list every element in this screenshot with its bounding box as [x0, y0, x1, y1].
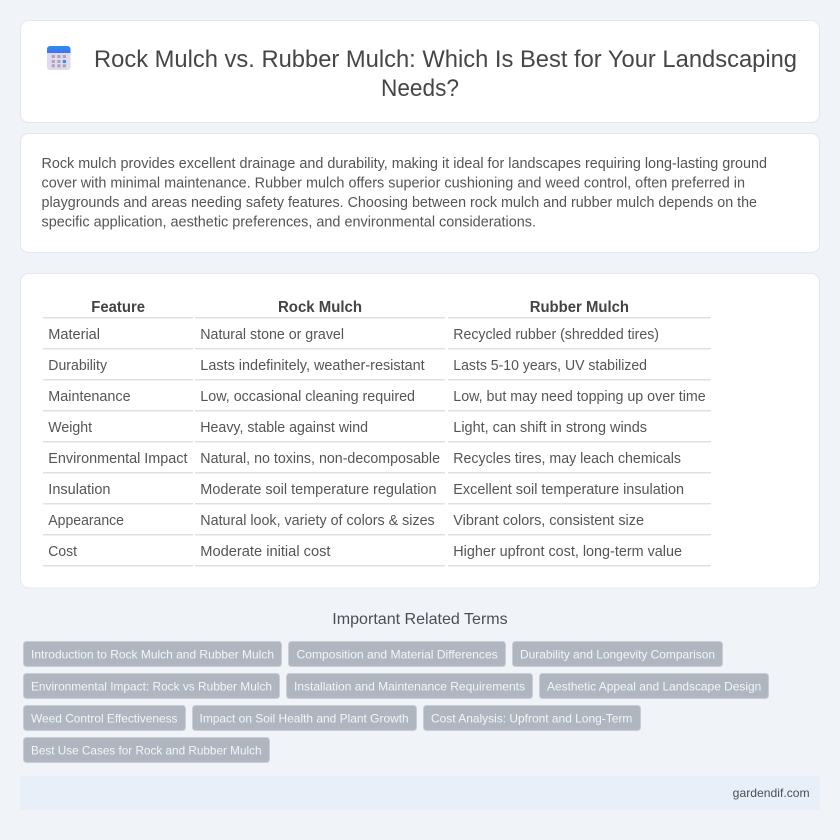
chip [286, 674, 532, 698]
table row: durability: Lasts indefinitely, weather-resistant [200, 358, 425, 374]
heading: important related terms: Important Related Terms [332, 611, 508, 628]
chip [288, 642, 506, 666]
panel: related term chips [24, 642, 768, 762]
table row: durability: Durability [48, 358, 108, 374]
chip: Best Use Cases for Rock and Rubber Mulch [31, 743, 262, 757]
chip: Environmental Impact: Rock vs Rubber Mulch [31, 679, 272, 693]
chip [24, 706, 186, 730]
text block: summary paragraph [42, 156, 767, 230]
table header [43, 299, 711, 318]
table header: Rock Mulch [278, 299, 362, 316]
table row: material: Material [48, 327, 100, 343]
table row: material: Recycled rubber (shredded tires) [453, 327, 659, 343]
text block: summary paragraph: specific application, aesthetic preferences, and environmental considerations. [42, 214, 536, 230]
chip: Durability and Longevity Comparison [520, 647, 715, 661]
table row: material: Natural stone or gravel [200, 327, 344, 343]
table row: material [43, 327, 711, 350]
panel: title card [20, 20, 820, 122]
table row: maintenance: Low, occasional cleaning required [200, 389, 415, 405]
chip: Introduction to Rock Mulch and Rubber Mulch [31, 647, 274, 661]
table row: environmental impact: Environmental Impact [48, 451, 188, 467]
table row: environmental impact: Recycles tires, may leach chemicals [453, 451, 681, 467]
table row: appearance: Appearance [48, 513, 124, 529]
table row: cost: Cost [48, 544, 77, 560]
table row: weight: Heavy, stable against wind [200, 420, 368, 436]
chip [192, 706, 416, 730]
table row: appearance: Vibrant colors, consistent size [453, 513, 644, 529]
table row: weight: Light, can shift in strong winds [453, 420, 647, 436]
table row: insulation [43, 482, 711, 504]
footer: gardendif.com [733, 786, 810, 800]
chip: Weed Control Effectiveness [31, 711, 178, 725]
table row: cost: Moderate initial cost [200, 544, 330, 560]
table header: Feature [91, 299, 145, 316]
chip: Impact on Soil Health and Plant Growth [200, 711, 409, 725]
chip: Aesthetic Appeal and Landscape Design [547, 679, 761, 693]
table row: cost [43, 544, 711, 566]
chip [24, 738, 270, 762]
chip: Installation and Maintenance Requirements [294, 679, 525, 693]
text block: summary paragraph: Rock mulch provides excellent drainage and durability, making it ideal for landscapes requiring long-lasting ground [42, 156, 767, 172]
table row: appearance [43, 513, 711, 536]
chip [24, 642, 282, 666]
table row: durability [43, 358, 711, 380]
table header: Rubber Mulch [530, 299, 629, 316]
table row: maintenance [43, 389, 711, 412]
table row: maintenance: Maintenance [48, 389, 131, 405]
chip: Cost Analysis: Upfront and Long-Term [431, 711, 632, 725]
title: Needs? [381, 75, 459, 102]
table row: environmental impact [43, 451, 711, 474]
chip: Composition and Material Differences [296, 647, 498, 661]
table row: cost: Higher upfront cost, long-term value [453, 544, 682, 560]
text block: summary paragraph: playgrounds and areas needing safety features. Choosing between rock mulch and rubber mulch depends on the [42, 195, 757, 211]
title [94, 46, 797, 102]
text block: summary paragraph: cover with minimal maintenance. Rubber mulch offers superior cushioning and weed control, often preferred in [42, 175, 745, 191]
chip [540, 674, 768, 698]
table row: environmental impact: Natural, no toxins, non-decomposable [200, 451, 440, 467]
table row: durability: Lasts 5-10 years, UV stabilized [453, 358, 647, 374]
panel: introduction text [20, 134, 820, 252]
table row: weight: Weight [48, 420, 92, 436]
panel: comparison table [20, 274, 820, 588]
chip [424, 706, 640, 730]
table row: insulation: Excellent soil temperature insulation [453, 482, 684, 498]
table row: weight [43, 420, 711, 442]
title: Rock Mulch vs. Rubber Mulch: Which Is Best for Your Landscaping [94, 46, 797, 73]
footer [20, 776, 820, 810]
table row: insulation: Moderate soil temperature regulation [200, 482, 436, 498]
table row: appearance: Natural look, variety of colors & sizes [200, 513, 435, 529]
icon: calendar [47, 46, 70, 70]
chip [24, 674, 280, 698]
chip [512, 642, 722, 666]
table row: insulation: Insulation [48, 482, 110, 498]
table row: maintenance: Low, but may need topping up over time [453, 389, 706, 405]
